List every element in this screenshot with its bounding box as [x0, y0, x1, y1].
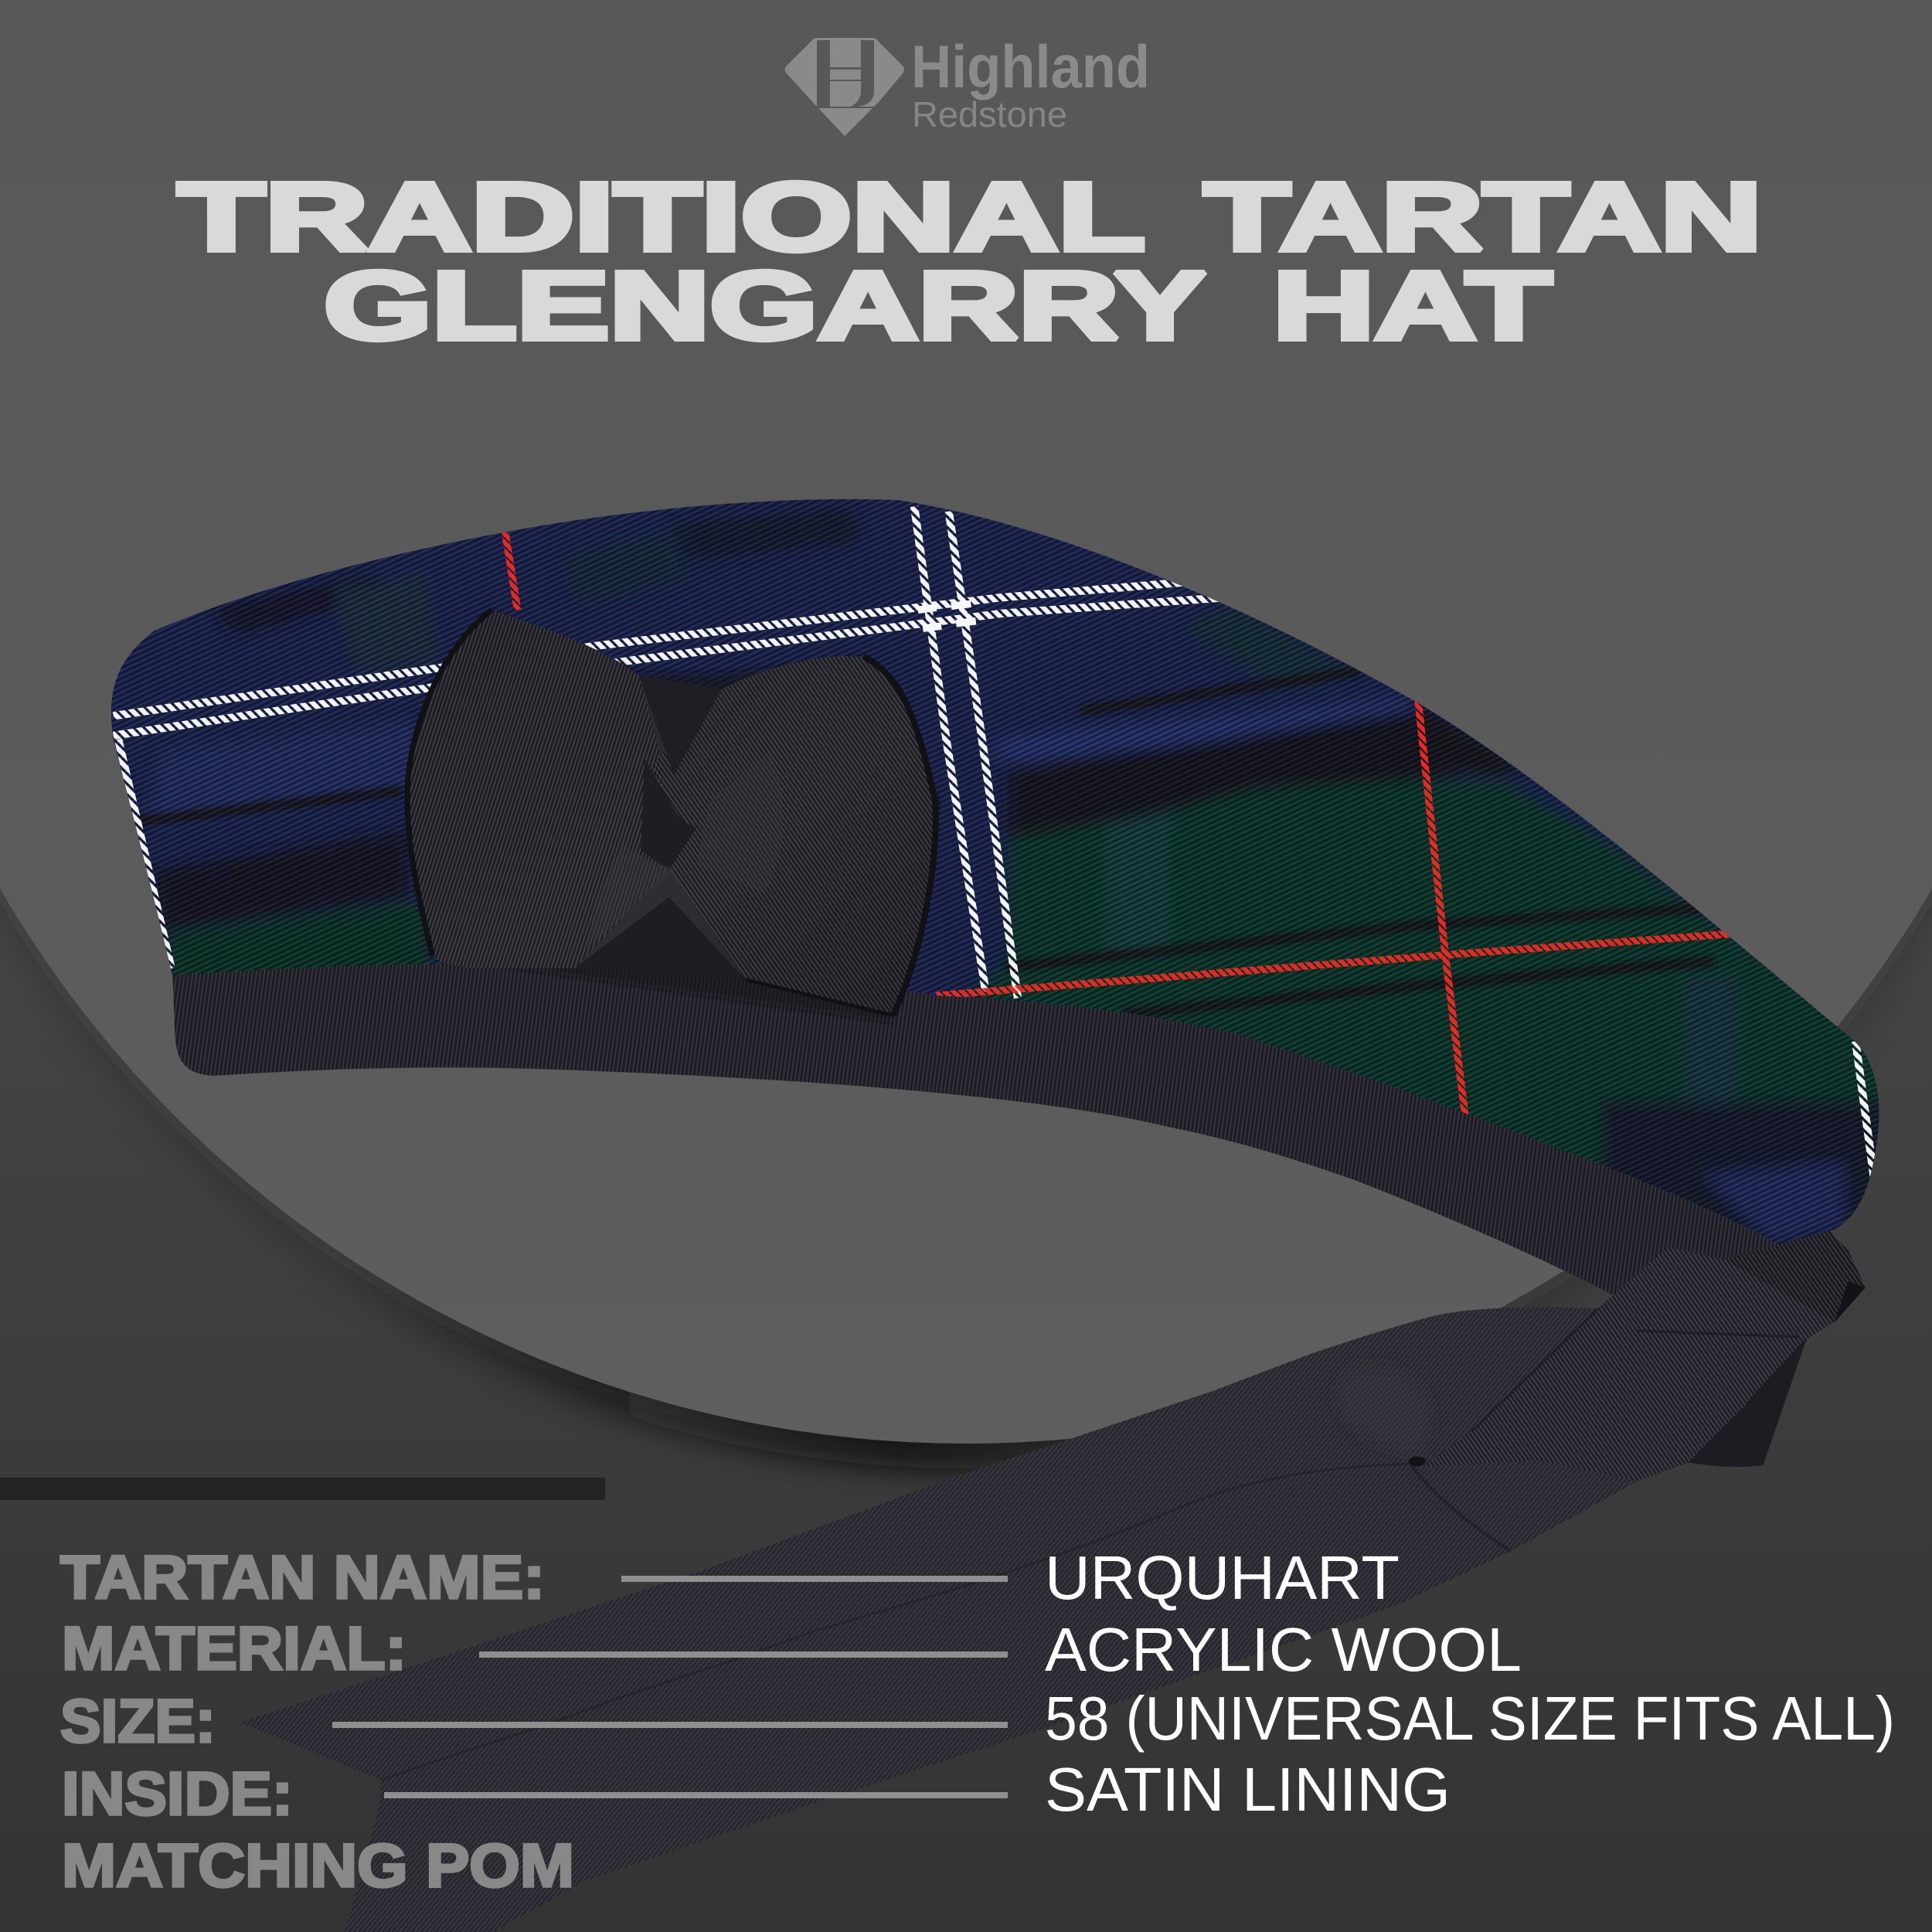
logo subtitle: Redstone	[912, 94, 1067, 134]
specification values	[1045, 1543, 1895, 1824]
tartan base navy	[111, 499, 1879, 1233]
dark accent bar	[0, 1478, 605, 1500]
value: material: ACRYLIC WOOL	[1045, 1615, 1522, 1684]
title: TRADITIONAL	[178, 164, 1145, 270]
label: size: SIZE:	[60, 1686, 216, 1755]
bow	[407, 610, 936, 1015]
tartan crown	[111, 499, 1879, 1244]
logo wordmark: Highland	[911, 32, 1150, 100]
stripe crossing highlight	[918, 604, 976, 628]
label: inside: INSIDE:	[62, 1759, 293, 1828]
title: GLENGARRY	[324, 252, 1206, 360]
dark overcheck lines	[137, 672, 1714, 1014]
knot front fold	[1424, 1247, 1835, 1481]
label: tartan name: TARTAN NAME:	[60, 1543, 545, 1611]
leader lines	[332, 1576, 1008, 1798]
specification labels	[60, 1543, 574, 1900]
disc bottom contact shadow	[0, 0, 1932, 1468]
knot upper tab	[1724, 1231, 1866, 1322]
illustration: glengarry hat	[74, 468, 1922, 1932]
title	[178, 164, 1762, 360]
value: tartan name: URQUHART	[1045, 1543, 1400, 1612]
bow shadow	[413, 610, 939, 1022]
bow centre folds	[574, 676, 784, 980]
label: material: MATERIAL:	[62, 1614, 406, 1682]
twill texture	[111, 499, 1879, 1244]
hat band	[172, 963, 1779, 1295]
green and dark tartan blocks	[148, 508, 1891, 1257]
knot rear fold	[1688, 1339, 1806, 1467]
red tartan stripes	[505, 532, 1729, 1115]
title: HAT	[1273, 252, 1552, 360]
large background disc	[0, 0, 1932, 1444]
disc shadow	[0, 0, 1932, 1454]
ribbon knot	[1408, 1231, 1866, 1481]
icon: diamond monogram	[785, 38, 904, 136]
value: size: 58 (UNIVERSAL SIZE FITS ALL)	[1045, 1684, 1895, 1753]
white tartan stripes	[114, 506, 1874, 1179]
logo: Highland Redstone	[785, 32, 1150, 136]
ribbon tail	[240, 1308, 1688, 1932]
value: inside: SATIN LINING	[1045, 1755, 1451, 1824]
title: TARTAN	[1204, 164, 1762, 270]
label: matching pom: MATCHING POM	[62, 1831, 574, 1900]
